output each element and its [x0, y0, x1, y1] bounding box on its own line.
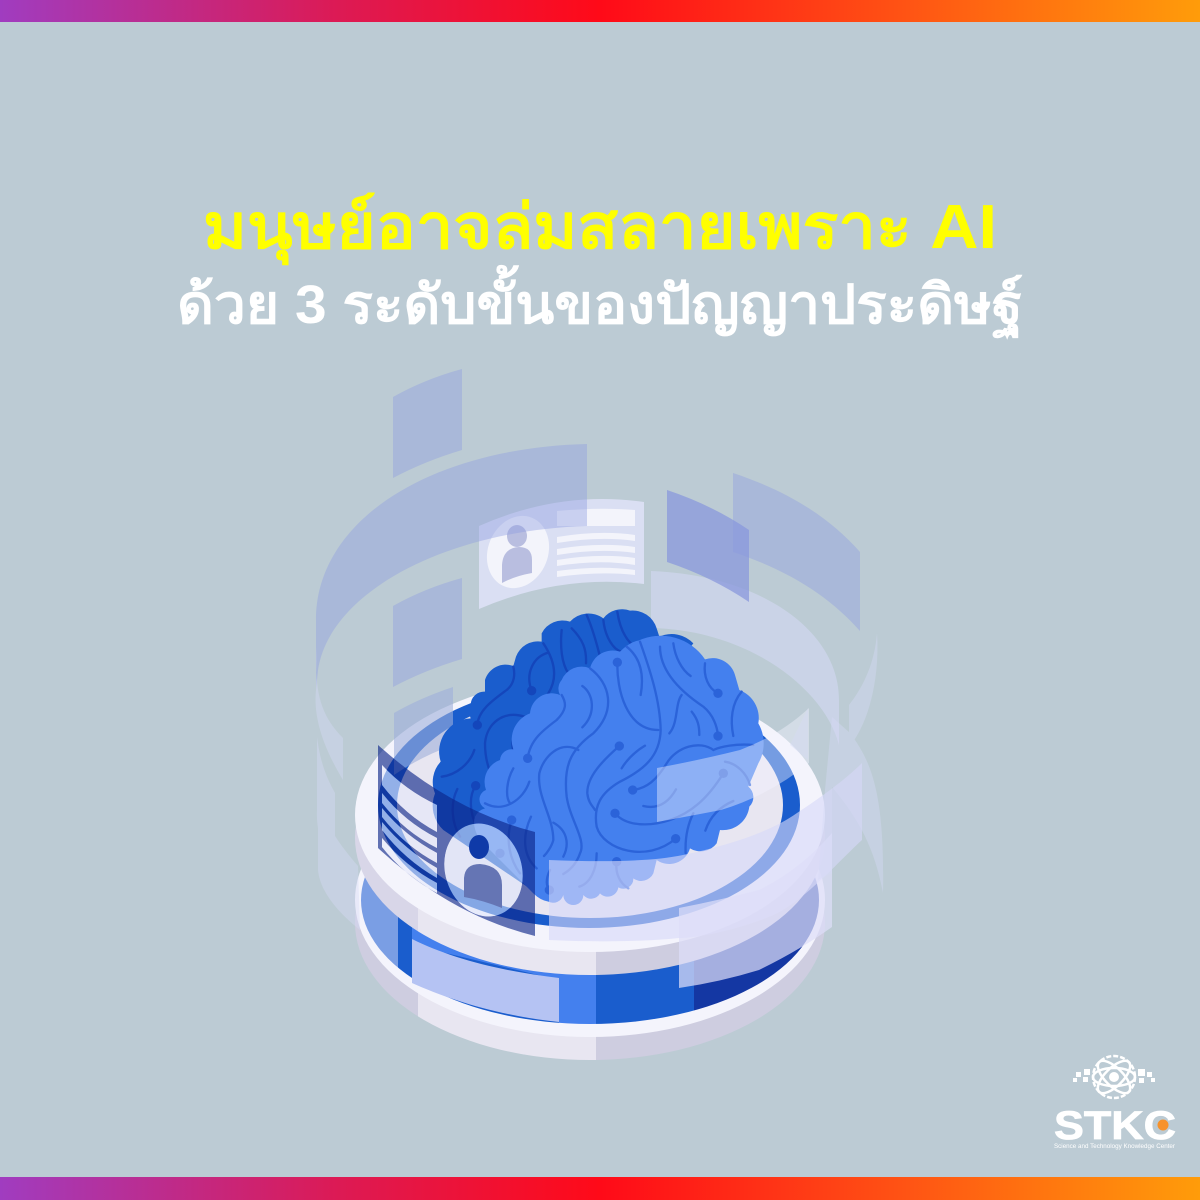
front lobe veins: [485, 642, 753, 895]
platform blue inner wall: [361, 877, 819, 1024]
top gradient bar: [0, 0, 1200, 22]
back lobe veins: [442, 612, 657, 837]
title line 2: ด้วย 3 ระดับขั้นของปัญญาประดิษฐ์: [177, 265, 1023, 340]
platform upper disc: [355, 678, 825, 975]
translucent panel over brain: [657, 708, 809, 822]
translucent panel lower right: [679, 833, 832, 988]
large holographic arc: [316, 444, 587, 690]
holographic ribbons: [316, 633, 883, 930]
light holographic ring right: [651, 571, 839, 745]
floating panel right front: [667, 490, 749, 602]
brain: [433, 609, 764, 905]
translucent panel lower left behind: [394, 687, 453, 775]
illustration: AI brain on platform: [316, 369, 883, 1060]
icon: orange dot: [1158, 1120, 1168, 1130]
left ID card: [378, 745, 535, 936]
brain front lobe: [474, 636, 764, 905]
brain back lobe: [433, 609, 693, 900]
floating panel mid left: [393, 578, 462, 687]
title line 1: มนุษย์อาจล่มสลายเพราะ AI: [203, 192, 997, 265]
floating panel right back: [733, 473, 860, 631]
icon: atom: [1073, 1056, 1155, 1098]
translucent band over disc: [549, 763, 862, 941]
bottom gradient bar: [0, 1177, 1200, 1200]
logo caption: Science and Technology Knowledge Center: [1054, 1144, 1175, 1150]
STKC logo: [1054, 1056, 1176, 1150]
holographic ID card: [476, 499, 644, 609]
logo wordmark: STKC: [1054, 1104, 1176, 1148]
platform lower disc: [355, 869, 825, 1060]
title: [177, 192, 1023, 340]
blue wall window: [412, 939, 559, 1022]
floating panel top left: [393, 369, 462, 478]
